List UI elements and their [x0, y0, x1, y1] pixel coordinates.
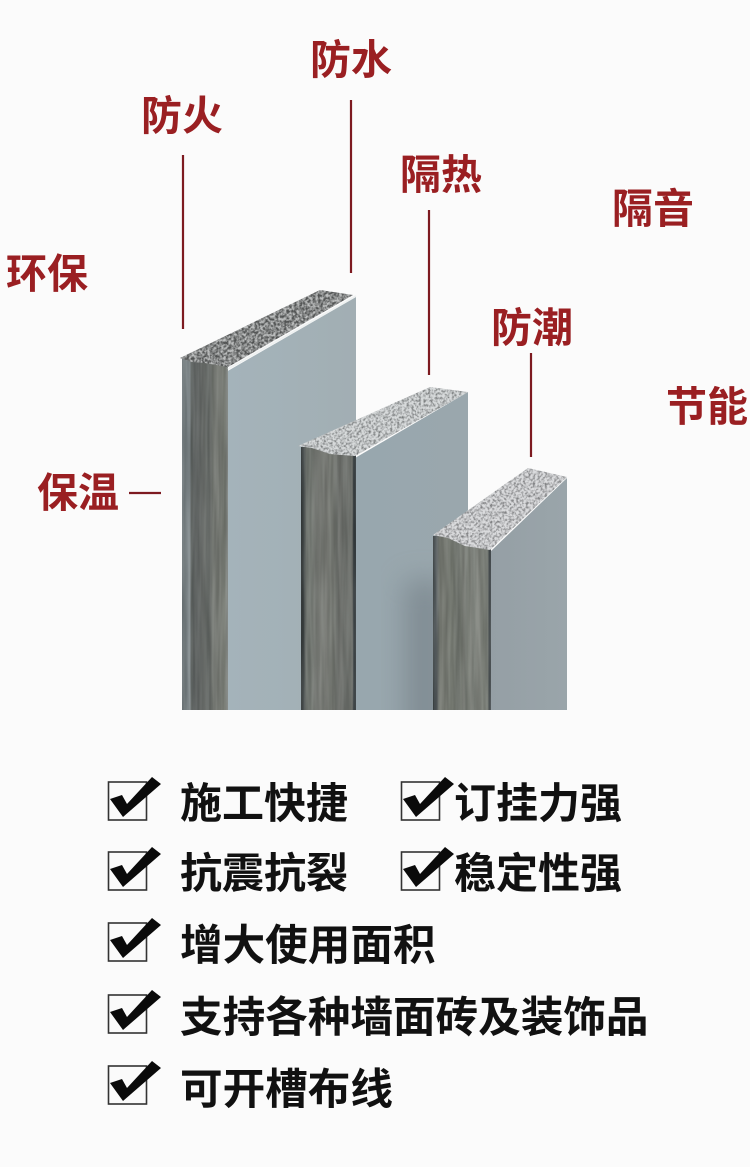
label: 防潮 with leader line: 防潮 — [491, 305, 573, 351]
checklist item: 施工快捷 — [108, 777, 348, 827]
checklist item: 增大使用面积: 增大使用面积 — [180, 922, 436, 970]
checklist item: 抗震抗裂 — [108, 847, 348, 897]
label: 环保: 环保 — [6, 251, 88, 297]
checklist item: 可开槽布线 — [108, 1061, 393, 1114]
label: 防火 with leader line: 防火 — [141, 93, 223, 139]
checklist item: 抗震抗裂: 抗震抗裂 — [180, 850, 348, 897]
label: 隔音: 隔音 — [612, 186, 694, 232]
label: 保温 with dash: 保温 — [37, 470, 119, 516]
checklist item: 可开槽布线: 可开槽布线 — [180, 1066, 393, 1114]
wall panel: short — [433, 468, 567, 710]
label: 保温 with dash — [37, 470, 161, 516]
checklist item: 支持各种墙面砖及装饰品: 支持各种墙面砖及装饰品 — [180, 994, 649, 1042]
panel: product photo of three wall panels — [180, 290, 567, 750]
wall panel: tall — [180, 290, 356, 710]
checklist item: 订挂力强: 订挂力强 — [454, 780, 622, 827]
checklist item: 施工快捷: 施工快捷 — [180, 780, 348, 827]
wall panel: medium — [299, 387, 468, 710]
checklist item: 稳定性强: 稳定性强 — [454, 850, 622, 897]
label: 防水 with leader line: 防水 — [310, 37, 392, 83]
label: 节能: 节能 — [666, 384, 748, 430]
label: 隔热 with leader line: 隔热 — [400, 152, 482, 198]
